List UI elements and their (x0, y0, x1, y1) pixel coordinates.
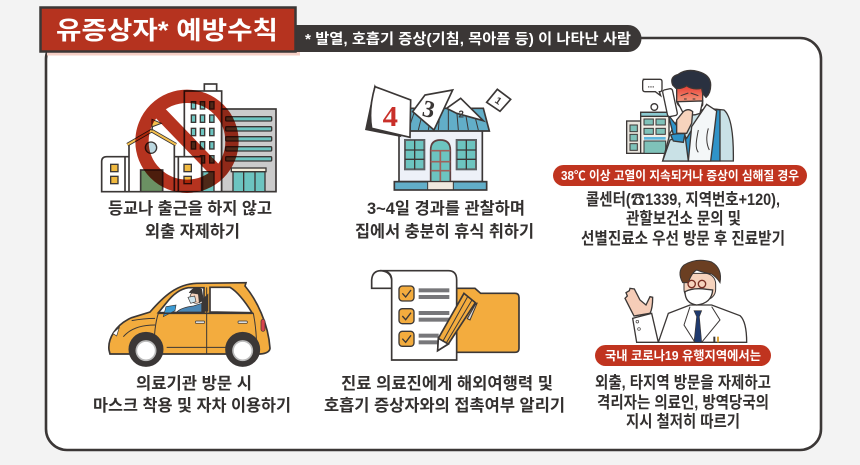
text: observe at home (355, 199, 534, 241)
text: use own car (93, 374, 291, 415)
text: stay home (108, 199, 272, 241)
icon: house with calendar pages: 1 (492, 95, 504, 108)
header: subtitle pill (290, 25, 642, 52)
icon: house with calendar pages: 4 (383, 102, 398, 133)
text: call center guidance: 콜센터(☎1339, 지역번호+120), (586, 190, 780, 209)
text: observe at home: 집에서 충분히 휴식 취하기 (355, 222, 534, 241)
icon: car with masked driver (109, 283, 270, 366)
callout: high fever pill: 38℃ 이상 고열이 지속되거나 증상이 심해질 경우 (561, 168, 799, 183)
text: tell travel history: 진료 의료진에게 해외여행력 및 (341, 373, 553, 393)
icon: checklist, folder and pencil (372, 271, 519, 360)
icon: coughing man with phone and clinic (627, 70, 733, 161)
text: call center guidance (581, 190, 785, 248)
icon: house with calendar pages (366, 87, 511, 190)
text: use own car: 의료기관 방문 시 (136, 374, 252, 393)
text: tell travel history: 호흡기 증상자와의 접촉여부 알리기 (324, 395, 565, 415)
text: call center guidance: 선별진료소 우선 방문 후 진료받기 (581, 229, 785, 248)
icon: house with calendar pages: 3 (420, 96, 437, 124)
text: outbreak area guidance: 격리자는 의료인, 방역당국의 (597, 393, 769, 412)
header: title box: 유증상자* 예방수칙 (56, 17, 278, 45)
text: observe at home: 3~4일 경과를 관찰하며 (367, 199, 525, 218)
icon: buildings with prohibition sign (102, 84, 276, 192)
callout: high fever pill (553, 165, 807, 186)
icon: prohibition sign (142, 96, 232, 186)
callout: outbreak area pill: 국내 코로나19 유행지역에서는 (605, 348, 761, 363)
text: outbreak area guidance: 외출, 타지역 방문을 자제하고 (595, 373, 771, 392)
header: subtitle pill: * 발열, 호흡기 증상(기침, 목아픔 등) 이 나타난 사람 (305, 31, 631, 48)
text: tell travel history (324, 373, 565, 415)
header: title box (40, 8, 300, 56)
text: use own car: 마스크 착용 및 자차 이용하기 (93, 396, 291, 415)
text: stay home: 외출 자제하기 (145, 222, 240, 241)
text: outbreak area guidance (595, 373, 771, 431)
icon: coughing man with phone and clinic: ... (648, 81, 654, 90)
icon: doctor waving (625, 260, 747, 342)
text: call center guidance: 관할보건소 문의 및 (626, 209, 741, 228)
panel: main rounded frame (46, 38, 821, 450)
icon: house with calendar pages: 2 (458, 109, 464, 120)
text: outbreak area guidance: 지시 철저히 따르기 (626, 412, 740, 431)
callout: outbreak area pill (595, 345, 771, 366)
text: stay home: 등교나 출근을 하지 않고 (108, 199, 272, 218)
